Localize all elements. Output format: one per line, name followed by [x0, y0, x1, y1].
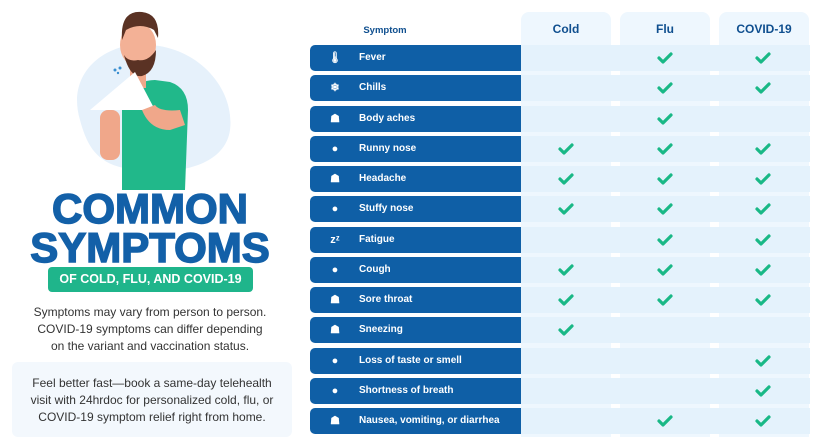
table: Loss of taste or smell: [359, 355, 462, 366]
table: ●: [332, 203, 338, 215]
title: SYMPTOMS: [30, 224, 270, 271]
subtitle pill: OF COLD, FLU, AND COVID-19: [59, 272, 242, 286]
table: Fever: [359, 52, 386, 63]
table: ❄: [330, 82, 340, 94]
table: Body aches: [359, 113, 415, 124]
table: ●: [332, 264, 338, 276]
description text: on the variant and vaccination status.: [51, 339, 249, 353]
description text: Symptoms may vary from person to person.: [34, 305, 266, 319]
table: 🌡: [328, 52, 342, 64]
table: Cough: [359, 264, 391, 275]
table: ☗: [330, 173, 340, 185]
callout box: [12, 362, 292, 437]
table: Stuffy nose: [359, 203, 413, 214]
description text: COVID-19 symptoms can differ depending: [37, 322, 263, 336]
table: Fatigue: [359, 234, 395, 245]
table: Symptom: [363, 25, 407, 36]
table: Flu: [656, 22, 674, 36]
description text: [34, 305, 266, 353]
table: Headache: [359, 173, 406, 184]
table: ☗: [330, 324, 340, 336]
table: ☗: [330, 415, 340, 427]
table: ☗: [330, 294, 340, 306]
callout box: visit with 24hrdoc for personalized cold, flu, or: [31, 393, 273, 407]
table: Sore throat: [359, 294, 412, 305]
callout box: COVID-19 symptom relief right from home.: [38, 410, 266, 424]
table: ●: [332, 385, 338, 397]
table: zᶻ: [330, 234, 340, 246]
table: Chills: [359, 82, 386, 93]
table: ●: [332, 355, 338, 367]
table: Shortness of breath: [359, 385, 453, 396]
table: ☗: [330, 113, 340, 125]
table: COVID-19: [736, 22, 792, 36]
table: Nausea, vomiting, or diarrhea: [359, 415, 500, 426]
table: Cold: [553, 22, 579, 36]
callout box: Feel better fast—book a same-day telehealth: [32, 376, 272, 390]
subtitle pill: [48, 267, 253, 292]
table: ●: [332, 143, 338, 155]
title: [30, 185, 270, 271]
title: COMMON: [52, 185, 248, 232]
table: Sneezing: [359, 324, 403, 335]
table: Runny nose: [359, 143, 416, 154]
illustration: sneezing man: [77, 12, 230, 190]
